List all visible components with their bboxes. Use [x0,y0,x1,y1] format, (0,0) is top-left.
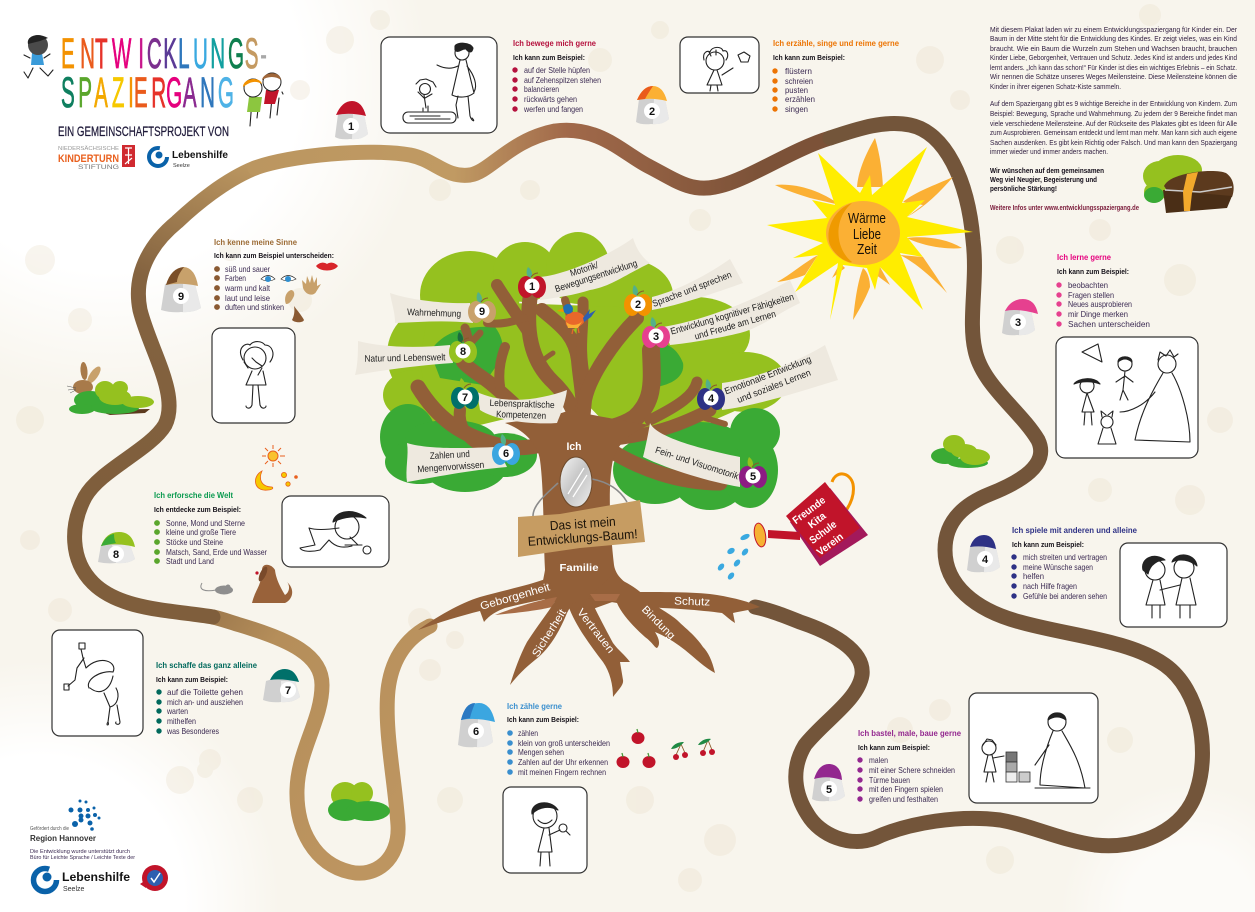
icon: nose [292,306,304,322]
list: Zahlen auf der Uhr erkennen [518,757,608,767]
intro: paragraph two [990,99,1237,156]
card: child crawling with snail [282,496,389,567]
list: malen [869,755,888,765]
subheading: Ich kann zum Beispiel: [773,53,845,62]
banner 3: kognitive Fähigkeiten: und Freude am Lernen [693,308,777,341]
heading: Ich zähle gerne [507,701,562,711]
banner 6: Zahlen: Mengenvorwissen [417,459,485,474]
watering can: Kita [806,510,829,531]
title: Entwicklungs-Spaziergang: E [134,69,148,117]
bush right [931,435,990,468]
banner 1: Motorik [540,238,650,300]
list: klein von groß unterscheiden [518,738,610,748]
title: Entwicklungs-Spaziergang: S [245,30,259,78]
subheading: Ich kann zum Beispiel: [858,743,930,752]
list: Stadt und Land [166,556,214,566]
intro: paragraph one: Kinder in ihrer eigenen Schatz-Kiste sammeln. [990,82,1121,91]
list: Sonne, Mond und Sterne [166,518,245,528]
icon: hand [302,275,321,295]
card: children learning with adult [1056,337,1198,458]
sun: Wärme Liebe Zeit: Liebe [853,227,881,243]
logo: Niedersächsische Kinderturn Stiftung: STIFTUNG [78,164,119,171]
title: Entwicklungs-Spaziergang: N [80,30,95,78]
treasure chest with bush [1143,155,1234,213]
bush [69,381,154,415]
title: Entwicklungs-Spaziergang: L [178,30,190,78]
root: Geborgenheit [418,578,557,630]
subheading: Ich kann zum Beispiel: [1057,267,1129,276]
icon: mouse [201,583,233,594]
milestone stone 7: 7 [285,685,291,697]
logo: Niedersächsische Kinderturn Stiftung: NIEDERSÄCHSISCHE [58,145,119,152]
banner 6: Zahlen [406,443,507,482]
list: helfen [1023,571,1044,581]
title: Entwicklungs-Spaziergang: G [218,69,234,117]
list: mit meinen Fingern rechnen [518,767,606,777]
milestone stone 3: 3 [1015,317,1021,329]
title: Entwicklungs-Spaziergang: I [138,30,144,78]
title: Entwicklungs-Spaziergang: N [200,69,215,117]
list: zählen [518,728,538,738]
list: mich an- und ausziehen [167,697,243,707]
title: Entwicklungs-Spaziergang: T [95,30,108,78]
list: pusten [785,85,808,95]
root: Bindung [588,575,715,673]
milestone stone 3 [1002,299,1038,335]
title: Entwicklungs-Spaziergang: I [128,69,134,117]
title: Entwicklungs-Spaziergang: E [61,30,75,78]
milestone stone 9 [161,267,201,312]
intro: closing wish: Weg viel Neugier, Begeisterung und [990,175,1097,184]
banner 1: Motorik: Bewegungsentwicklung [553,257,639,294]
milestone stone 2: 2 [649,106,655,118]
apple 4 [697,379,725,410]
apple 1: 1 [529,281,535,293]
logo: Region Hannover [30,800,100,843]
logo: Leichte Sprache badge [140,865,168,891]
apple 3: 3 [653,331,659,343]
list: Neues ausprobieren [1068,299,1132,309]
crown: inner dark green right [643,343,683,388]
intro: closing wish [990,166,1104,193]
banner 8: Natur und Lebenswelt [355,341,453,375]
list: beobachten [1068,280,1108,290]
tree roots [418,575,760,697]
banner 4: Emotionale Entwicklung [722,345,838,410]
milestone stone 6: 6 [473,726,479,738]
list: meine Wünsche sagen [1023,562,1093,572]
list [507,728,610,777]
card: child speaking [680,37,759,93]
subheading: Ich kann zum Beispiel: [156,675,228,684]
heading: Ich erzähle, singe und reime gerne [773,38,899,48]
list: mir Dinge merken [1068,309,1128,319]
list: auf der Stelle hüpfen [524,65,590,75]
icon: moon and stars [255,471,298,490]
sign: Das ist mein Entwicklungs-Baum [518,500,645,557]
watering can [752,474,868,566]
milestone stone 7 [263,669,300,702]
card: woman and child on log [381,37,497,133]
list: Gefühle bei anderen sehen [1023,591,1107,601]
banner 5: Visuomotorik: Fein- und Visuomotorik [654,444,740,481]
banner 9: Wahrnehmung [390,293,473,323]
section 6: Ich zähle gerne [458,701,715,873]
logo: Niedersächsische Kinderturn Stiftung: KINDERTURN [58,153,119,165]
section 9: Ich kenne meine Sinne [161,237,338,423]
root: Schutz [640,592,760,623]
apple 2 [624,285,652,316]
card: child with magnifier [503,787,587,873]
icon: ear [285,290,294,304]
list [857,755,955,804]
credit text [30,849,135,861]
apple 9: 9 [479,306,485,318]
list: singen [785,104,808,114]
winding road [75,123,1202,873]
list: erzählen [785,94,815,104]
intro: closing wish: Wir wünschen auf dem gemeinsamen [990,166,1104,175]
apple 4: 4 [708,393,715,405]
list: was Besonderes [166,726,219,736]
sun: Wärme Liebe Zeit: Zeit [857,242,877,258]
title: Entwicklungs-Spaziergang: P [78,69,92,117]
subheading: Ich kann zum Beispiel unterscheiden: [214,251,334,260]
milestone stone 5 [812,764,845,801]
list: Matsch, Sand, Erde und Wasser [166,547,267,557]
apple 5 [739,457,767,488]
intro: paragraph one: Wir nennen die Schätze unseres Weges Meilensteine. Diese Meilensteine können die [990,72,1237,81]
intro: paragraph two: immer wieder und immer anders machen. [990,147,1108,156]
section 4: Ich spiele mit anderen und alleine [967,525,1227,627]
label: Bindung: Bindung [639,604,677,642]
list: flüstern [785,66,812,76]
title: Entwicklungs-Spaziergang: S [61,69,75,117]
watering can: Verein [815,531,846,558]
section 7: Ich schaffe das ganz alleine [52,630,300,736]
list: Sachen unterscheiden [1068,319,1150,329]
icon: eyes [261,276,296,282]
milestone stone 2 [636,86,669,124]
banner 6: Zahlen: Zahlen und [430,448,470,461]
sun: yellow rays [767,147,973,320]
logo: Lebenshilfe Seelze bottom: Lebenshilfe [62,872,130,884]
title: Entwicklungs-Spaziergang: Z [112,69,124,117]
title: Entwicklungs-Spaziergang: N [210,30,225,78]
milestone stone 4: 4 [982,554,989,566]
milestone stone 8: 8 [113,549,119,561]
title: Entwicklungs-Spaziergang [61,30,267,117]
milestone stone 8 [98,532,135,563]
banner 7: Lebenspraktische Kompetenzen: Lebenspraktische [489,397,555,410]
list [154,518,267,566]
card: adult and child stacking blocks [969,693,1098,803]
list: auf Zehenspitzen stehen [524,75,601,85]
heading: Ich bewege mich gerne [513,38,596,48]
list: Mengen sehen [518,747,564,757]
list: mit den Fingern spielen [869,784,943,794]
logo: Lebenshilfe Seelze top: Lebenshilfe [172,150,228,161]
apple 7: 7 [462,392,468,404]
label: Vertrauen: Vertrauen [574,607,616,656]
credit text: Die Entwicklung wurde unterstützt durch [30,849,130,855]
subtitle: Ein Gemeinschaftsprojekt von: EIN GEMEINSCHAFTSPROJEKT VON [58,123,229,139]
intro: paragraph one: Mit diesem Plakat laden wir zu einem Entwicklungsspaziergang für Kinder ein. Der [990,25,1238,34]
list: auf die Toilette gehen [167,687,243,697]
list [1011,552,1107,601]
heading: Ich kenne meine Sinne [214,237,297,247]
card: child getting dressed [52,630,143,736]
logo: Niedersächsische Kinderturn Stiftung [58,145,135,171]
icon: sun small [262,445,285,467]
root: Sicherheit [510,598,575,685]
heading: Ich schaffe das ganz alleine [156,660,257,670]
intro: paragraph two: viele verschiedene Meilensteine. Auf der Rückseite des Plakates gibt es Ideen für Alle [990,119,1237,128]
sun: Wärme Liebe Zeit [848,211,886,258]
milestone stone 9: 9 [178,291,184,303]
apple 6 [492,434,520,465]
banner 8: Natur und Lebenswelt: Natur und Lebenswelt [364,351,446,364]
list: mit einer Schere schneiden [869,765,955,775]
sign: Das ist mein Entwicklungs-Baum: Das ist mein [549,514,616,533]
root: Vertrauen [568,598,630,697]
list: laut und leise [225,293,270,303]
apple 7 [451,378,479,409]
title: Entwicklungs-Spaziergang: R [151,69,166,117]
water drops [716,533,751,581]
bird on branch [557,304,596,334]
credit text: Büro für Leichte Sprache / Leichte Texte der [30,855,135,861]
apple 8: 8 [460,346,466,358]
title: Entwicklungs-Spaziergang: G [166,69,182,117]
label: Sicherheit: Sicherheit [530,607,569,659]
label: Schutz: Schutz [674,595,710,609]
heading: Ich spiele mit anderen und alleine [1012,525,1137,535]
tree trunk [505,410,650,610]
list: Stöcke und Steine [166,537,223,547]
list: balancieren [524,84,559,94]
icons: apples [616,729,656,768]
logo: Lebenshilfe Seelze top: Seelze [173,163,190,169]
bush bottom [328,782,390,821]
tree branches [418,285,725,483]
milestone stone 1 [335,101,368,139]
banner 7: Lebenspraktische Kompetenzen [477,390,567,423]
banner 1: Motorik: Motorik/ [568,259,600,278]
banner 9: Wahrnehmung: Wahrnehmung [407,306,461,319]
title: Entwicklungs-Spaziergang: - [260,30,267,78]
card: two children comforting [1120,543,1227,627]
intro text block [990,25,1238,212]
crown: inner dark green left [430,327,503,385]
apple 8 [449,332,477,363]
apple 3 [642,317,670,348]
heading: Ich bastel, male, baue gerne [858,728,961,738]
section 1: Ich bewege mich gerne [335,37,601,139]
list: süß und sauer [225,264,270,274]
intro: closing wish: persönliche Stärkung! [990,184,1057,193]
sun: Wärme Liebe Zeit: Wärme [848,211,886,227]
banner 2: Sprache: Sprache und sprechen [651,269,733,309]
root labels [479,581,710,659]
title: Entwicklungs-Spaziergang: U [193,30,208,78]
title: Entwicklungs-Spaziergang: K [163,30,177,78]
list: warten [166,706,188,716]
watering can: Freunde [790,494,828,527]
list: rückwärts gehen [524,94,577,104]
logo: Region Hannover: Gefördert durch die [30,826,69,832]
intro: paragraph one: Baum in der Mitte steht für die Entwicklung des Kindes. Er zeigt vieles, was ein Kind [990,34,1237,43]
section 5: Ich bastel, male, baue gerne [812,693,1098,804]
list [214,264,284,312]
subheading: Ich kann zum Beispiel: [513,53,585,62]
banner 4: Emotionale Entwicklung: Emotionale Entwicklung [723,353,813,396]
label: Familie: Familie [560,562,599,574]
heading: Ich erforsche die Welt [154,490,233,500]
apple 6: 6 [503,448,509,460]
title: Entwicklungs-Spaziergang: A [94,69,108,117]
icons: cherries [671,739,715,760]
sun: orange rays [775,138,962,320]
title: Entwicklungs-Spaziergang: A [183,69,197,117]
milestone stone 6 [458,703,495,747]
label: Geborgenheit: Geborgenheit [479,581,551,613]
list: Türme bauen [869,775,910,785]
sun: core [826,201,900,265]
watering can: Schule [807,518,839,547]
sun [767,138,973,320]
label: Ich: Ich [566,441,582,453]
list: werfen und fangen [523,104,583,114]
list: greifen und festhalten [869,794,938,804]
apple 1 [518,267,546,298]
section 2: Ich erzähle, singe und reime gerne [636,37,899,124]
list: schreien [785,76,813,86]
list: warm und kalt [224,283,271,293]
logo: Region Hannover: Region Hannover [30,834,96,843]
intro: website: Weitere Infos unter www.entwicklungsspaziergang.de [990,203,1139,212]
subheading: Ich kann zum Beispiel: [1012,540,1084,549]
list [1056,280,1150,329]
card: child smelling [212,328,295,423]
mirror with cord [533,457,627,516]
icon: rabbit [67,362,103,394]
icon: boy running [24,35,53,78]
title: Entwicklungs-Spaziergang: C [147,30,162,78]
apple 5: 5 [750,471,756,483]
logo: Lebenshilfe Seelze top [149,148,228,169]
milestone stone 4 [967,535,1000,572]
subheading: Ich entdecke zum Beispiel: [154,505,241,514]
section 3: Ich lerne gerne [1002,252,1198,458]
banner 4: Emotionale Entwicklung: und soziales Lernen [735,367,812,405]
milestone stone 5: 5 [826,784,832,796]
banner 3: kognitive Fähigkeiten [663,280,800,345]
crown: light green foliage [383,232,787,435]
list: Fragen stellen [1068,290,1114,300]
subheading: Ich kann zum Beispiel: [507,715,579,724]
banner 3: kognitive Fähigkeiten: Entwicklung kognitiver Fähigkeiten [669,291,795,337]
list [512,65,601,114]
list: Farben [225,273,246,283]
list: mich streiten und vertragen [1023,552,1107,562]
list: kleine und große Tiere [166,527,236,537]
title: Entwicklungs-Spaziergang: W [112,30,131,78]
list [156,687,243,736]
icon: two children [243,73,283,126]
banner 7: Lebenspraktische Kompetenzen: Kompetenzen [496,408,546,421]
icon: lips [316,263,338,270]
list: duften und stinken [225,302,284,312]
crown: dark green foliage left [380,404,537,492]
list: mithelfen [167,716,196,726]
intro: paragraph one [990,25,1238,91]
milestone stone 1: 1 [348,121,354,133]
banner 5: Visuomotorik [643,423,740,487]
title: Entwicklungs-Spaziergang: G [228,30,244,78]
intro: paragraph one: braucht. Wie ein Baum die Wurzeln zum Stehen und Wachsen braucht, brauchen [990,44,1237,53]
bush with rabbit [67,362,154,415]
apple 9 [468,292,496,323]
section 8: Ich erforsche die Welt [98,445,389,603]
apple 2: 2 [635,299,641,311]
list: nach Hilfe fragen [1023,581,1077,591]
icon: dog [252,565,292,603]
list [772,66,815,114]
logo: Lebenshilfe Seelze bottom: Seelze [63,886,85,893]
crown: dark green foliage right [613,408,780,510]
tree crown [380,232,787,510]
sign: Das ist mein Entwicklungs-Baum: Entwicklungs-Baum! [527,526,638,549]
heading: Ich lerne gerne [1057,252,1111,262]
logo: Lebenshilfe Seelze bottom [34,868,130,893]
